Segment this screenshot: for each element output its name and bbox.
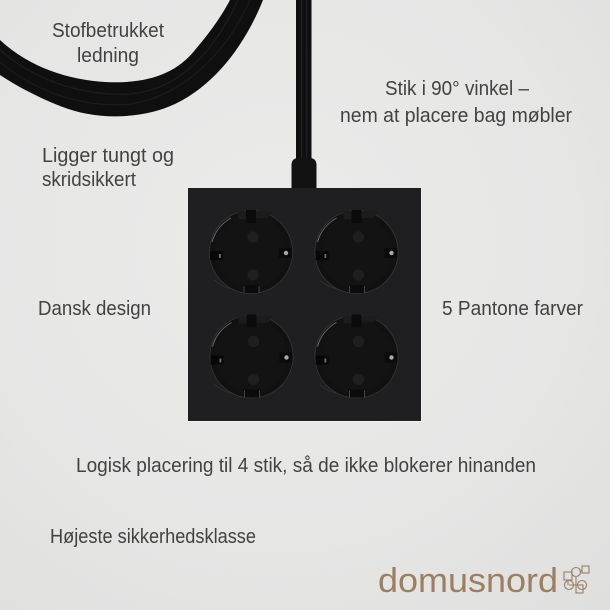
angled plug <box>292 158 316 188</box>
label: Logisk placering: Logisk placering til 4 stik, så de ikke blokerer hinanden <box>76 455 536 477</box>
label: Stofbetrukket ledning <box>52 20 164 67</box>
socket top right <box>314 210 398 294</box>
logo wordmark: domusnord <box>378 562 558 600</box>
power strip plate <box>188 188 422 422</box>
socket top left <box>209 210 293 294</box>
label: 5 Pantone farver: 5 Pantone farver <box>442 298 583 320</box>
label: Ligger tungt og skridsikkert <box>42 145 174 191</box>
label: Ligger tungt og skridsikkert: Ligger tungt og <box>42 145 174 167</box>
label: Stofbetrukket ledning: ledning <box>77 45 139 67</box>
socket bottom left <box>210 314 294 398</box>
label: Ligger tungt og skridsikkert: skridsikkert <box>42 169 136 191</box>
label: Højeste sikkerhedsklasse: Højeste sikkerhedsklasse <box>50 526 256 548</box>
label: Stik i 90 grader vinkel: nem at placere bag møbler <box>340 105 572 127</box>
logo icon <box>564 566 589 593</box>
label: Stofbetrukket ledning: Stofbetrukket <box>52 20 164 42</box>
label: Stik i 90 grader vinkel <box>340 78 572 127</box>
straight power cable <box>296 0 312 160</box>
fabric cable coil <box>0 0 263 116</box>
label: Stik i 90 grader vinkel: Stik i 90° vinkel – <box>385 78 530 100</box>
label: Dansk design: Dansk design <box>38 298 151 320</box>
socket bottom right <box>314 314 398 398</box>
